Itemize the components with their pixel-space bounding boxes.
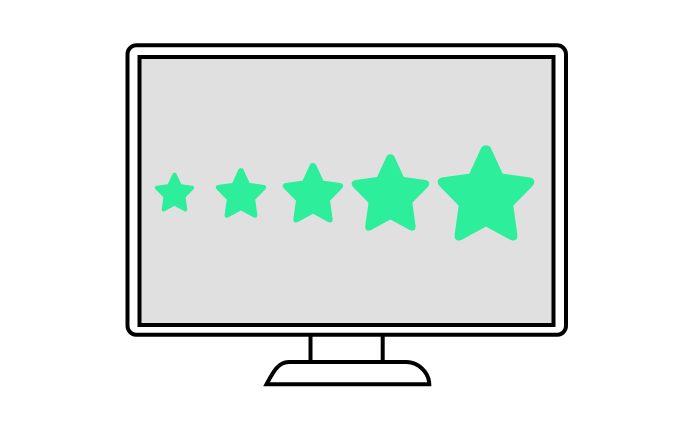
star 2 [216, 168, 266, 218]
icon: monitor [128, 45, 566, 384]
star rating row [155, 145, 534, 241]
star 4 [352, 154, 429, 231]
monitor stand base [266, 362, 429, 384]
monitor outer frame [128, 45, 566, 335]
star 5 [438, 145, 534, 241]
monitor screen [140, 57, 554, 325]
star 1 [155, 173, 194, 211]
monitor stand neck [310, 335, 383, 362]
star 3 [283, 163, 343, 222]
